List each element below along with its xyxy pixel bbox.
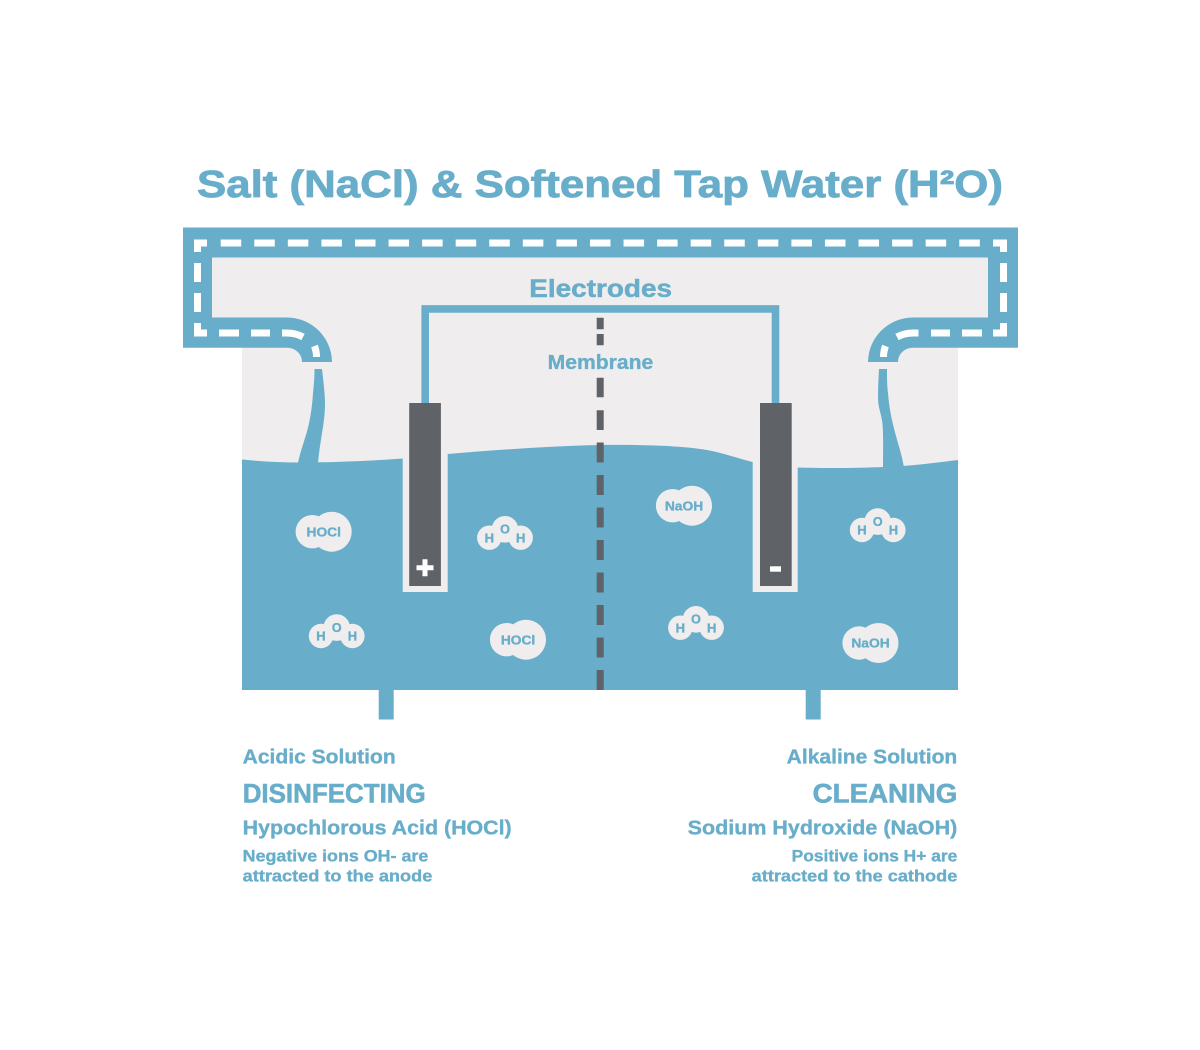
molecule: HOCl lower [490,620,546,660]
text block: acidic solution: Hypochlorous Acid (HOCl) [243,816,512,839]
membrane [597,318,604,690]
molecule: water, right lower [668,606,724,640]
electrode wire [425,309,776,403]
molecule: water, right lower: H [707,620,716,635]
molecule: water, left upper: O [500,522,510,536]
icon: plus [416,559,434,576]
panel: tank interior [212,258,988,690]
molecule: water, right upper: H [857,523,867,538]
text block: acidic solution [243,746,512,886]
molecule: water, left lower: H [316,629,326,644]
text block: acidic solution: DISINFECTING [243,779,426,809]
feed pipe [183,228,1018,362]
molecule: NaOH lower: NaOH [851,636,890,651]
molecule: water, right upper: O [873,515,883,529]
text block: acidic solution: Negative ions OH- are [243,848,428,866]
molecule: NaOH upper: NaOH [665,498,703,513]
molecule: water, right upper [850,508,906,542]
text block: alkaline solution: CLEANING [813,779,957,809]
drain: right [806,689,821,720]
water body with electrode slots [242,445,958,690]
molecule: water, left upper: H [485,530,494,545]
molecule: HOCl lower: HOCl [501,632,535,647]
pipe body [183,228,1018,362]
text block: acidic solution: attracted to the anode [243,868,432,886]
water stream: right [878,369,904,468]
text block: alkaline solution: attracted to the cathode [752,868,957,886]
text block: acidic solution: Acidic Solution [243,746,396,768]
molecule: water, left lower: O [332,621,342,635]
molecule: water, right lower: O [691,612,701,626]
drain: left [379,689,394,720]
text block: alkaline solution: Alkaline Solution [787,746,957,768]
molecule: water, left lower [309,614,365,648]
text block: alkaline solution: Positive ions H+ are [792,848,957,866]
molecule: NaOH upper [656,486,712,526]
text block: alkaline solution: Sodium Hydroxide (NaOH) [688,816,957,839]
molecule: water, right upper: H [889,523,898,538]
molecule: water, left lower: H [348,629,357,644]
icon: minus [770,566,781,572]
molecule: water, right lower: H [676,620,685,635]
molecule: NaOH lower [842,623,898,663]
anode [409,403,441,586]
molecule: water, left upper: H [516,530,525,545]
label: membrane: Membrane [548,352,653,374]
molecule: HOCl upper [296,512,352,552]
molecule: water, left upper [477,516,533,550]
label: electrodes: Electrodes [529,275,672,303]
molecule: HOCl upper: HOCl [307,524,341,539]
text block: alkaline solution [688,746,957,886]
title: Salt (NaCl) & Softened Tap Water (H²O) [197,164,1003,206]
cathode [760,403,792,586]
pipe flow dashes [198,243,1004,357]
water stream: left [298,369,325,463]
